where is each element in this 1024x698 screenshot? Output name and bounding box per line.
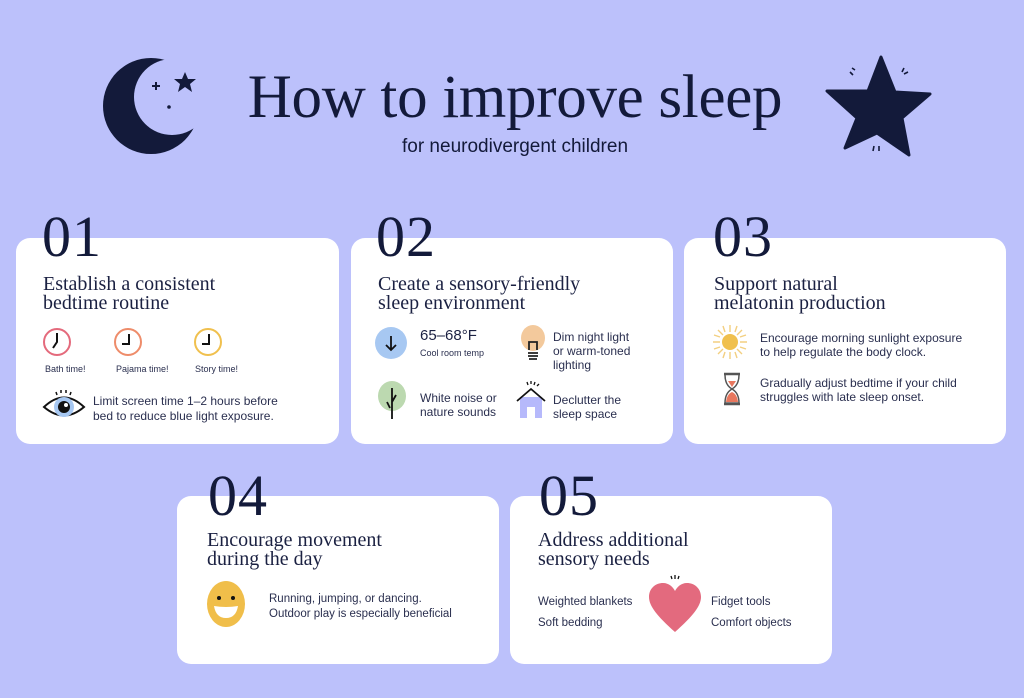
icon: clocks (43, 328, 222, 356)
text: sunlight: to help regulate the body clock. (760, 345, 926, 359)
text: lighting: or warm-toned (553, 344, 630, 358)
text: noise: White noise or (420, 391, 497, 405)
text: declutter (553, 393, 621, 421)
text: temp: 65–68°F (420, 327, 477, 344)
heading: environment: sleep environment (378, 292, 525, 314)
icon: smiley (207, 581, 245, 627)
number 02: 02 (376, 204, 436, 269)
text: bedtime adjust: struggles with late sleep onset. (760, 390, 924, 404)
number 01: 01 (42, 204, 102, 269)
text: left items (538, 596, 632, 629)
title: How to improve sleep (248, 64, 782, 131)
heading: sensory: Address additional (538, 529, 689, 551)
icon: heart (649, 575, 701, 632)
heading: routine: Establish a consistent (43, 273, 215, 295)
icon: sun (713, 325, 747, 359)
icon: star (825, 56, 932, 156)
panel: 05 sensory (510, 496, 832, 664)
text: lighting (553, 330, 630, 372)
number 03: 03 (713, 204, 773, 269)
panel: 01 routine (16, 238, 339, 444)
text: right items (711, 596, 792, 629)
icon: eye (42, 390, 86, 417)
icon: bulb (521, 325, 545, 360)
heading: routine: bedtime routine (43, 292, 169, 314)
text: right items: Fidget tools (711, 596, 770, 608)
text: movement: Outdoor play is especially beneficial (269, 608, 452, 620)
text: screen time: Limit screen time 1–2 hours before (93, 394, 278, 408)
text: declutter: sleep space (553, 407, 617, 421)
panel: 02 environment (351, 238, 673, 444)
heading: sensory (538, 529, 689, 570)
text: lighting: lighting (553, 358, 591, 372)
text: right items: Comfort objects (711, 617, 792, 629)
heading: melatonin: melatonin production (714, 292, 886, 314)
heading: environment: Create a sensory-friendly (378, 273, 580, 295)
icon: tree (378, 381, 406, 419)
text: noise: nature sounds (420, 405, 496, 419)
icon: house (516, 381, 546, 418)
text: noise (420, 391, 497, 419)
text: bedtime adjust: Gradually adjust bedtime if your child (760, 376, 957, 390)
heading: melatonin (714, 273, 886, 314)
heading: sensory: sensory needs (538, 548, 650, 570)
number 04: 04 (208, 463, 268, 528)
panel: 01 routine: Story time! (195, 364, 238, 374)
text: movement: Running, jumping, or dancing. (269, 593, 422, 605)
text: sunlight (760, 331, 962, 359)
text: sunlight: Encourage morning sunlight exposure (760, 331, 962, 345)
text: left items: Weighted blankets (538, 596, 632, 608)
text: movement (269, 593, 452, 620)
heading: movement: Encourage movement (207, 529, 382, 551)
subtitle: for neurodivergent children (402, 136, 628, 157)
clock labels: Bath time! (45, 364, 86, 374)
panel: 03 melatonin (684, 238, 1006, 444)
heading: movement (207, 529, 382, 570)
panel: 04 movement (177, 496, 499, 664)
panel: 02 environment: Cool room temp (420, 348, 484, 358)
panel: 01 routine: Pajama time! (116, 364, 169, 374)
heading: environment (378, 273, 580, 314)
icon: hourglass (724, 372, 740, 406)
icon: moon with stars (103, 58, 196, 154)
heading: movement: during the day (207, 548, 323, 570)
heading: melatonin: Support natural (714, 273, 838, 295)
number 05: 05 (539, 463, 599, 528)
heading: routine (43, 273, 216, 314)
text: declutter: Declutter the (553, 393, 621, 407)
text: left items: Soft bedding (538, 617, 603, 629)
text: bedtime adjust (760, 376, 957, 404)
icon: temp (375, 327, 407, 359)
text: lighting: Dim night light (553, 330, 629, 344)
text: screen time (93, 394, 278, 423)
text: screen time: bed to reduce blue light exposure. (93, 409, 274, 423)
